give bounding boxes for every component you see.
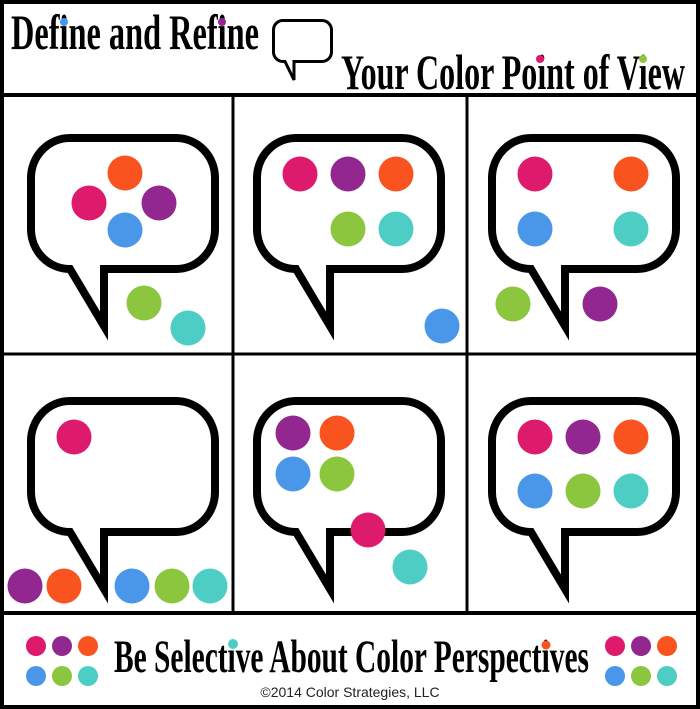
panel: cell 3 [492, 138, 676, 326]
panel: cell 6 [492, 401, 676, 589]
title: Define and Refine: Define and Refine [11, 4, 259, 60]
panel: cell 5 [257, 401, 441, 589]
icon: right dot grid [605, 636, 677, 686]
title: Define and Refine [11, 4, 259, 60]
panel: cell 2 [257, 138, 460, 344]
copyright: ©2014 Color Strategies, LLC [260, 684, 440, 700]
icon: left dot grid [26, 636, 98, 686]
panel: cell 4 [8, 401, 228, 604]
panel: cell 1 [31, 138, 215, 346]
icon: small speech bubble [273, 20, 332, 80]
